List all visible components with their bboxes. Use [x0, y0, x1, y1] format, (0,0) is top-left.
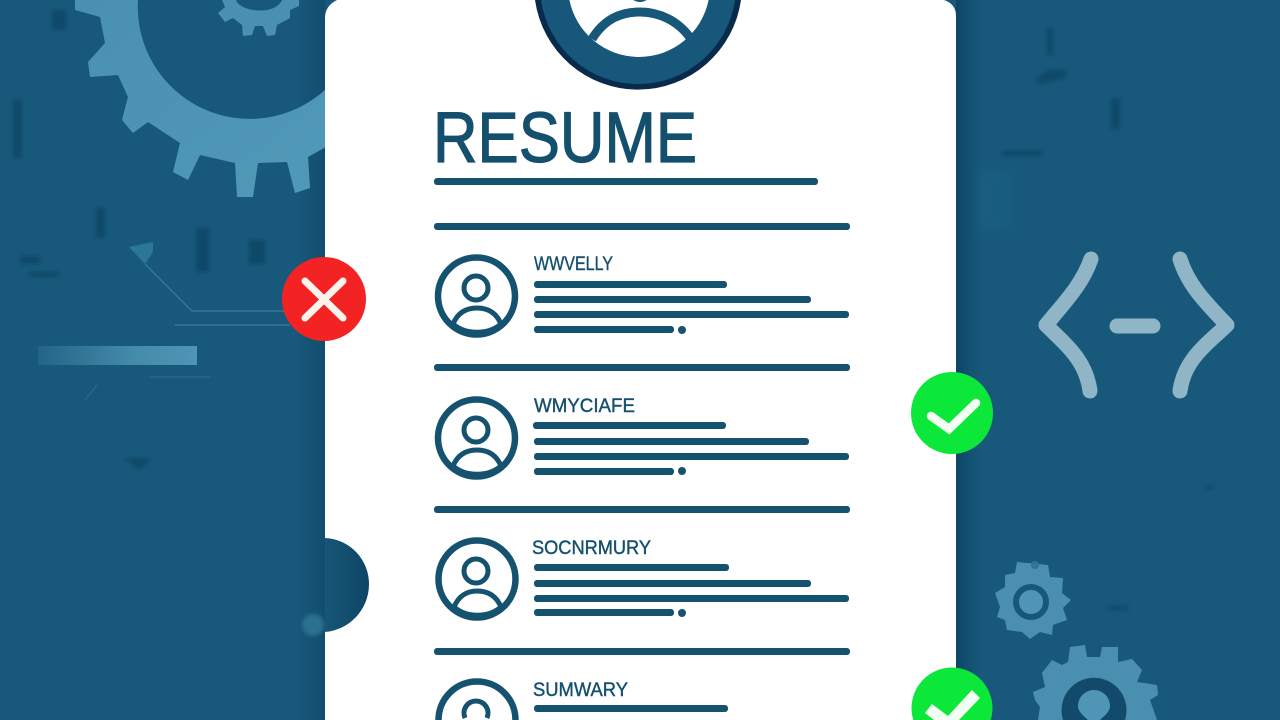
circuit lines — [85, 264, 290, 400]
label 2: WMYCIAFE — [534, 396, 635, 417]
label 4: SUMWARY — [533, 680, 628, 701]
icon: red cross badge — [282, 257, 366, 341]
background marks — [13, 10, 1213, 610]
lighter background strip — [978, 170, 1012, 230]
title: RESUME — [433, 99, 697, 178]
code brackets icon — [1046, 259, 1227, 391]
icon: person 4 — [438, 681, 516, 720]
label 3: SOCNRMURY — [532, 538, 651, 559]
divider — [434, 506, 850, 513]
section row 3 — [438, 538, 849, 618]
icon: person 1 — [438, 258, 515, 334]
notch shading — [325, 538, 369, 632]
section row 4 — [438, 680, 728, 720]
icon: person 2 — [438, 400, 515, 476]
icon: main avatar — [535, 0, 741, 90]
text lines 1 — [534, 281, 849, 334]
circuit node — [129, 242, 153, 264]
large gear — [75, 0, 326, 197]
card edge shadows — [295, 0, 982, 720]
gradient bar — [38, 346, 197, 365]
section row 2 — [438, 396, 849, 476]
divider — [434, 648, 850, 655]
icon: person 3 — [438, 540, 516, 618]
text lines 3 — [534, 564, 849, 617]
label 1: WWVELLY — [534, 254, 613, 275]
panel: resume card — [325, 0, 956, 720]
text line 4 — [534, 705, 728, 712]
section row 1 — [438, 254, 849, 334]
text lines 2 — [533, 422, 849, 475]
large right gear — [1033, 645, 1158, 720]
faint notch dot — [302, 614, 324, 636]
icon: green check badge 2 — [912, 668, 992, 720]
divider — [434, 364, 850, 371]
small top gear — [218, 0, 299, 36]
divider — [434, 223, 850, 230]
icon: green check badge 1 — [911, 372, 993, 454]
small right gear — [995, 561, 1071, 639]
title underline — [434, 178, 818, 185]
